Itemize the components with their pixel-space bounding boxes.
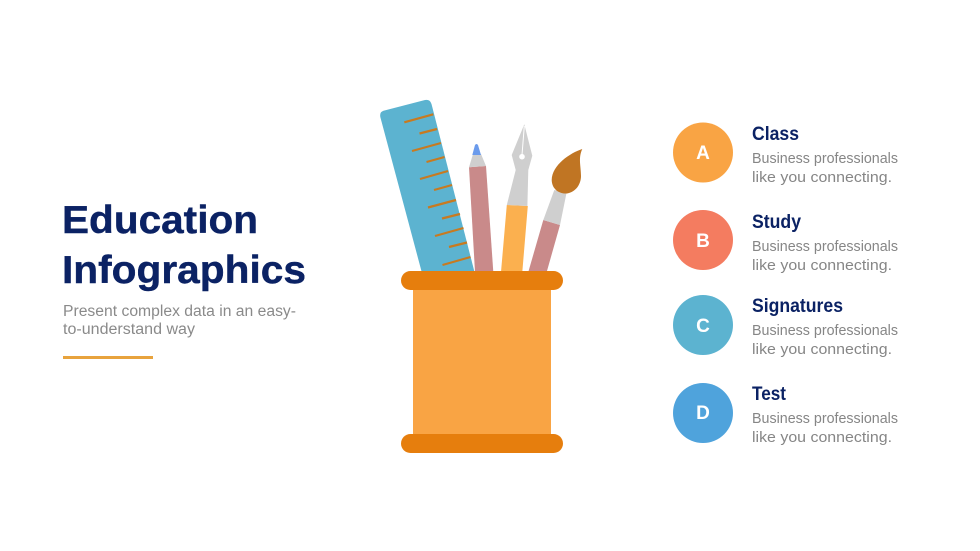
item D: Test: D (696, 403, 710, 424)
icon: ruler (380, 100, 474, 272)
icon: fountain pen (501, 124, 532, 272)
item A: Class: A (696, 143, 710, 164)
item A: Class: Business professionals (752, 151, 898, 167)
item B: Study: Study (752, 212, 801, 233)
icon: pencil (469, 144, 493, 272)
cup bottom rim (401, 434, 563, 453)
item B: Study: B (696, 231, 710, 252)
item C: Signatures: C (696, 316, 710, 337)
item D: Test: like you connecting. (752, 430, 892, 446)
item D: Test: Business professionals (752, 411, 898, 427)
cup body (413, 288, 551, 436)
item C: Signatures: like you connecting. (752, 342, 892, 358)
item B: Study: like you connecting. (752, 258, 892, 274)
item A: Class: Class (752, 124, 799, 145)
cup top rim (401, 271, 563, 290)
item D: Test: Test (752, 384, 787, 405)
subtitle (63, 303, 296, 338)
item C: Signatures: Business professionals (752, 323, 898, 339)
item B: Study: Business professionals (752, 239, 898, 255)
title (62, 199, 306, 292)
item B: Study (673, 210, 898, 274)
accent underline (63, 356, 153, 359)
item A: Class: like you connecting. (752, 170, 892, 186)
title: Education (62, 199, 258, 242)
item C: Signatures (673, 295, 898, 358)
item C: Signatures: Signatures (752, 296, 843, 317)
title: Infographics (62, 249, 306, 292)
subtitle: Present complex data in an easy- (63, 303, 296, 320)
icon: paintbrush (528, 149, 582, 272)
icon: pencil holder with tools (380, 100, 582, 453)
subtitle: to-understand way (63, 321, 195, 338)
item A: Class (673, 122, 898, 186)
item D: Test (673, 383, 898, 446)
